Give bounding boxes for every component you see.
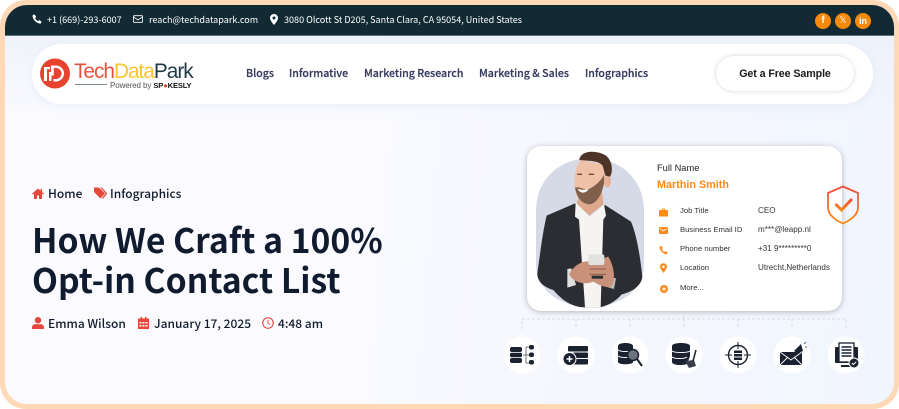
phone value: +31 9*********0	[758, 244, 811, 253]
author name: Emma Wilson	[48, 315, 126, 332]
logo tagline: Powered by SP●KESLY	[110, 81, 191, 90]
top bar contact details	[32, 13, 522, 26]
icon: add server	[558, 336, 594, 374]
face	[574, 160, 607, 204]
navigation links: Informative	[289, 66, 348, 81]
icon: more	[660, 285, 668, 293]
phone label: Phone number	[680, 244, 730, 253]
icon: phone	[660, 246, 668, 254]
dashed connectors	[522, 311, 846, 329]
icon: x	[835, 13, 851, 29]
social icons	[815, 13, 871, 29]
navigation links: Marketing & Sales	[479, 66, 569, 81]
data process icons	[504, 336, 864, 374]
icon: database cleaning	[666, 336, 702, 374]
navigation bar	[32, 44, 873, 104]
neck	[577, 188, 603, 216]
date: January 17, 2025	[154, 315, 251, 332]
location value: Utrecht,Netherlands	[758, 263, 830, 272]
title: How We Craft a 100%	[32, 214, 383, 263]
icon: facebook: f	[821, 15, 825, 26]
icon: linkedin	[855, 13, 871, 29]
icon: x: 𝕏	[839, 16, 847, 26]
ear	[604, 175, 611, 187]
post meta	[32, 315, 323, 332]
breadcrumb	[32, 185, 181, 202]
button: get a free sample: Get a Free Sample	[739, 68, 831, 80]
more label: More...	[680, 283, 704, 292]
icon: home	[32, 188, 44, 199]
icon: linkedin: in	[859, 16, 867, 26]
icon: verified documents	[828, 336, 864, 374]
icon: tags	[94, 187, 108, 199]
email address: reach@techdatapark.com	[149, 13, 258, 26]
beard	[575, 174, 604, 204]
person name: Marthin Smith	[657, 179, 729, 191]
navigation links: Blogs	[246, 66, 274, 81]
navigation links	[246, 66, 648, 81]
icon: location pin	[270, 14, 278, 25]
street address: 3080 Olcott St D205, Santa Clara, CA 95054, United States	[284, 13, 522, 26]
button: get a free sample	[716, 56, 854, 91]
breadcrumb category text: Infographics	[110, 185, 181, 202]
icon: calendar	[138, 317, 149, 329]
email label: Business Email ID	[680, 225, 742, 234]
phone number: +1 (669)-293-6007	[47, 13, 122, 26]
logo mark	[40, 58, 70, 88]
icon: clock	[262, 317, 274, 329]
hair	[579, 152, 612, 177]
icon: target list	[720, 336, 756, 374]
icon: author	[32, 317, 44, 329]
icon: database search	[612, 336, 648, 374]
navigation links: Infographics	[585, 66, 648, 81]
time: 4:48 am	[278, 315, 323, 332]
icon: envelope	[133, 15, 143, 23]
field label: full name: Full Name	[657, 163, 699, 173]
profile card	[527, 146, 842, 311]
left cuff	[567, 268, 576, 288]
logo	[40, 58, 194, 90]
top contact bar	[5, 5, 894, 36]
icon: mail	[659, 227, 668, 234]
smile	[578, 188, 589, 193]
navigation links: Marketing Research	[364, 66, 463, 81]
phone	[588, 254, 604, 265]
logo wordmark: TechDataPark	[74, 60, 193, 83]
job title value: CEO	[758, 206, 776, 215]
jacket	[537, 203, 642, 307]
job title label: Job Title	[680, 206, 709, 215]
icon: verified shield	[827, 186, 859, 224]
email value: m***@leapp.nl	[758, 225, 811, 234]
location label: Location	[680, 263, 709, 272]
profile photo	[536, 152, 644, 308]
title	[32, 214, 383, 303]
breadcrumb home text: Home	[48, 185, 82, 202]
icon: email campaign	[774, 336, 810, 374]
icon: phone	[32, 14, 42, 24]
detail rows	[659, 206, 830, 293]
photo backdrop	[536, 158, 644, 307]
finger lines	[589, 269, 606, 274]
icon: database tree	[504, 336, 540, 374]
icon: facebook	[815, 13, 831, 29]
icon: briefcase	[659, 208, 668, 216]
icon: location	[660, 263, 667, 273]
right cuff	[609, 277, 616, 289]
eyes	[577, 172, 594, 176]
title: Opt-in Contact List	[32, 254, 341, 303]
hands	[569, 257, 614, 288]
shirt	[575, 202, 606, 307]
